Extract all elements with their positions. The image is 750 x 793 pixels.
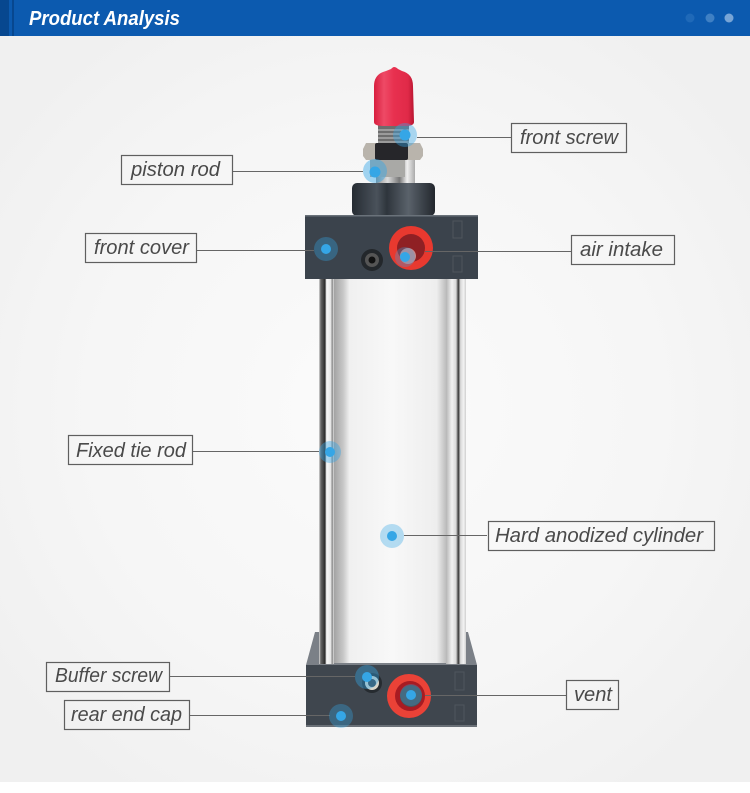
label: buffer screw: [46, 662, 170, 692]
front cover: [305, 215, 478, 279]
label: front screw: front screw: [520, 127, 620, 149]
label: hard anodized cylinder: [488, 522, 714, 550]
rear end cap bevel: [306, 632, 477, 665]
marker: vent: [400, 684, 422, 706]
heading: Product Analysis: [29, 8, 180, 30]
label: rear end cap: rear end cap: [71, 704, 182, 726]
label: fixed tie rod: Fixed tie rod: [76, 440, 187, 462]
hex nut: [363, 143, 423, 160]
label: vent: vent: [574, 684, 613, 706]
header bar: [0, 0, 750, 36]
label: buffer screw: Buffer screw: [55, 665, 163, 687]
label: vent: [566, 680, 618, 710]
red protective cap: [374, 67, 414, 126]
product: pneumatic cylinder: [305, 67, 478, 727]
header dots: [686, 14, 734, 22]
label: front cover: [86, 234, 196, 262]
label: hard anodized cylinder: Hard anodized cylinder: [495, 525, 704, 547]
marker: front cover: [314, 237, 338, 261]
piston rod shaft: [370, 158, 415, 183]
label: front cover: front cover: [94, 237, 190, 259]
blue markers: [314, 123, 422, 728]
marker: front screw: [393, 123, 417, 147]
collar: [352, 183, 435, 216]
tie rods: [319, 279, 466, 664]
leader lines: [170, 138, 571, 716]
label: piston rod: piston rod: [130, 159, 221, 181]
label: air intake: air intake: [580, 239, 663, 261]
marker: air intake: [395, 247, 415, 267]
cylinder barrel: [333, 279, 451, 663]
label: fixed tie rod: [68, 436, 192, 464]
label: front screw: [512, 124, 626, 152]
threads: [378, 124, 409, 144]
marker: fixed tie rod: [319, 441, 341, 463]
label: air intake: [572, 236, 674, 264]
label: rear end cap: [64, 700, 190, 730]
rear end cap: [306, 665, 477, 727]
marker: piston rod: [363, 159, 387, 183]
label: piston rod: [122, 156, 232, 184]
marker: hard anodized cylinder: [380, 524, 404, 548]
marker: rear end cap: [329, 704, 353, 728]
marker: buffer screw: [355, 665, 379, 689]
